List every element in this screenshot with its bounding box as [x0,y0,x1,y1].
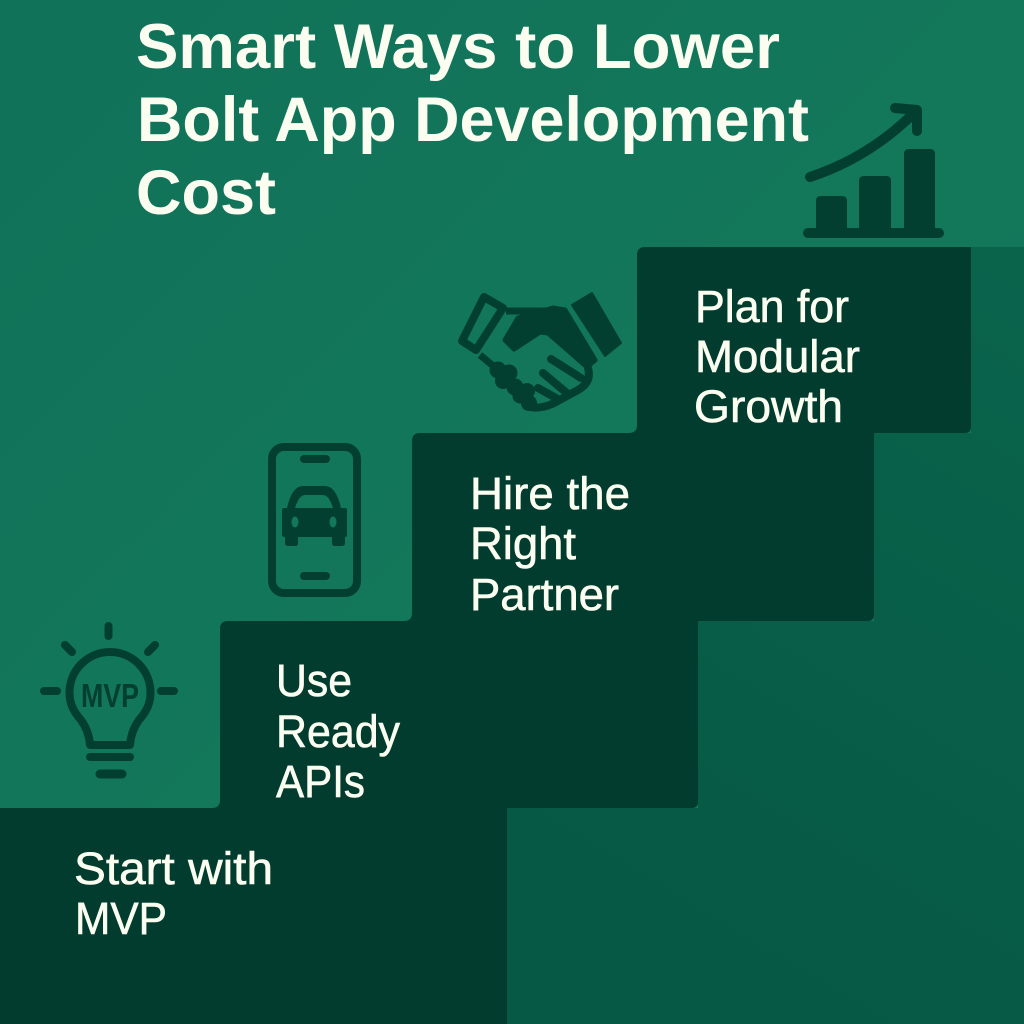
step 2 label: Ready [276,706,400,757]
staircase [0,247,971,1024]
step 4 label [694,281,860,432]
step 1 label [74,843,273,944]
title [136,12,809,228]
step 2 label: Use [276,655,352,706]
step 1 label: Start with [74,843,273,894]
step 4 label: Growth [694,381,843,432]
step 1 label: MVP [75,893,167,944]
icon: handshake [462,293,621,411]
step 4 label: Modular [695,331,860,382]
lower right background [507,247,1024,1024]
step 3 label: Right [470,518,576,569]
step 3 label [470,468,630,620]
step 3 label: Hire the [470,468,630,519]
step 3 label: Partner [470,569,619,620]
icon: growth chart [803,108,944,238]
icon: MVP light bulb [44,626,174,774]
title: Smart Ways to Lower [136,12,780,82]
icon: MVP light bulb: MVP [81,677,139,714]
step 2 label [276,655,400,807]
step 4 label: Plan for [695,281,849,332]
step 2 label: APIs [276,756,365,807]
title: Bolt App Development [137,85,809,155]
title: Cost [136,158,276,228]
icon: phone with car [272,447,357,593]
